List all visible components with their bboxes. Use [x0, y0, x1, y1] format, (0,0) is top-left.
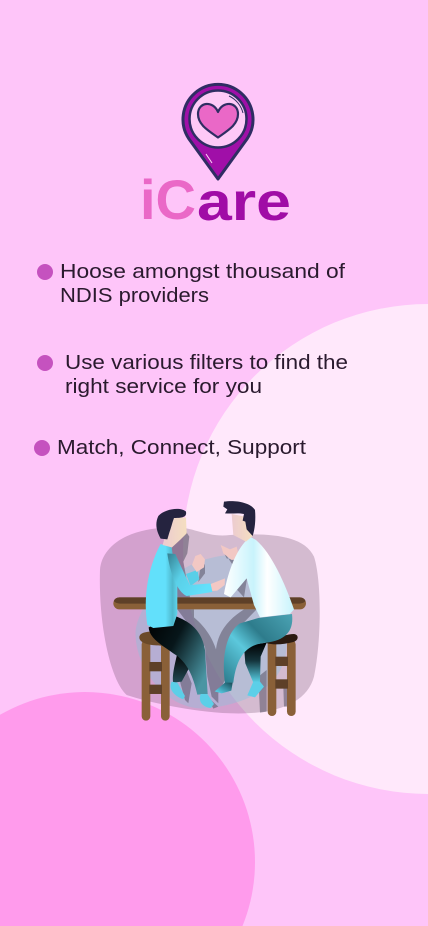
hand: [221, 545, 239, 560]
hair: [223, 501, 255, 536]
neck and face: [163, 517, 187, 547]
logo: [140, 84, 291, 232]
bullet item 1: Hoose amongst thousand of: [60, 260, 345, 283]
figure shadows: [172, 527, 290, 713]
forearm: [186, 570, 199, 586]
bullet item 1: [37, 260, 345, 307]
right stool: [265, 634, 298, 716]
bullet item 2: [37, 351, 348, 398]
floor shadow blob: [136, 555, 287, 708]
bullet item 1: NDIS providers: [60, 284, 209, 307]
wordmark: iCare: iC: [140, 168, 196, 231]
pink circle: [0, 692, 255, 926]
man right: [215, 501, 294, 697]
feet: [171, 682, 185, 699]
torso: [224, 537, 294, 617]
back leg: [244, 643, 267, 683]
light circle: [183, 304, 428, 794]
hands: [192, 554, 205, 572]
arm: [167, 553, 212, 596]
bullet item 2: Use various filters to find the: [65, 351, 348, 374]
torso: [146, 544, 177, 628]
feet: [215, 683, 233, 693]
front leg: [149, 616, 208, 695]
bullet item 3: Match, Connect, Support: [57, 436, 306, 459]
neck and face: [232, 514, 253, 542]
bullet item 2: right service for you: [65, 375, 262, 398]
back leg: [173, 653, 192, 683]
shadow blob: [100, 527, 320, 713]
man left: [146, 509, 225, 708]
table: [113, 597, 306, 609]
left stool: [139, 632, 175, 721]
wordmark: iCare: are: [197, 172, 291, 232]
icon: location pin with heart: [183, 84, 253, 179]
front leg: [224, 614, 292, 683]
bullet list: [34, 260, 348, 459]
illustration: two men talking at a table: [100, 501, 320, 721]
hair: [156, 509, 186, 539]
wordmark: iCare: [140, 168, 291, 232]
